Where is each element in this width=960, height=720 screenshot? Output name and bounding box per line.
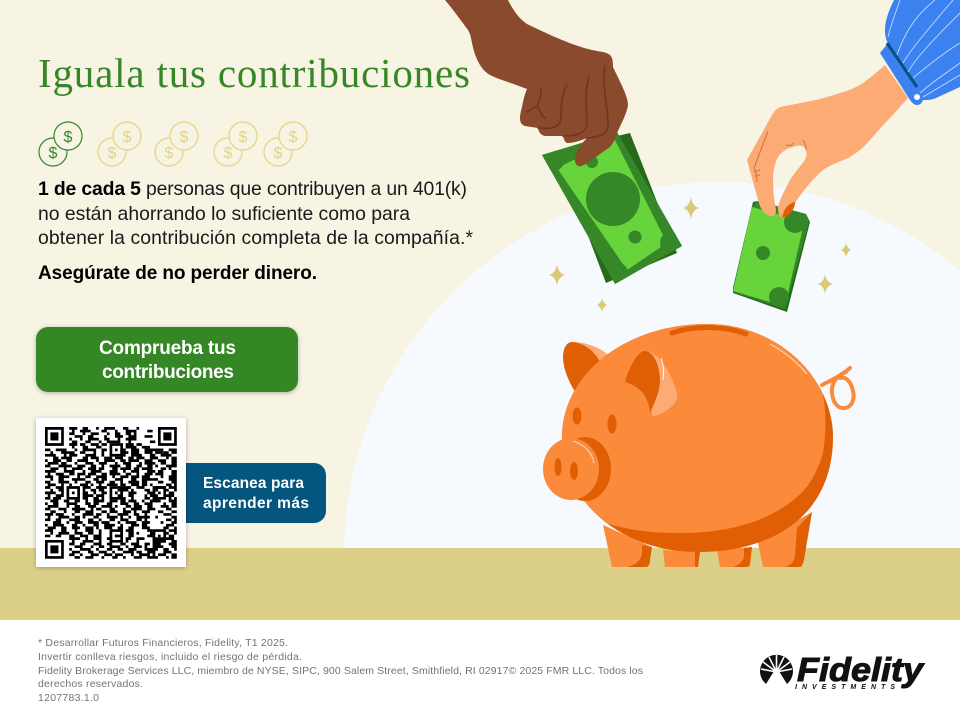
call to action button: Comprueba tus [99,338,236,359]
coin pair 4 [214,122,257,166]
coin pair 1 highlighted green: $ [64,129,73,146]
coin pair 2: $ [123,129,132,146]
pale blue arc backdrop [344,182,960,548]
body text: 1 de cada 5 personas que contribuyen a un 401(k) [38,178,467,200]
far ear [563,342,608,392]
footnotes: Fidelity Brokerage Services LLC, miembro de NYSE, SIPC, 900 Salem Street, Smithfield, RI 02917© 2025 FMR LLC. Todos los [38,665,643,677]
coin pair 2: $ [108,145,117,162]
dollar bill held by dark hand [541,132,684,284]
scan label tab: Escanea para [203,475,304,492]
Fidelity logo: INVESTMENTS [795,684,895,691]
coin pair 4: $ [224,145,233,162]
footnotes: Invertir conlleva riesgos, incluido el riesgo de pérdida. [38,651,302,663]
title: Iguala tus contribuciones [38,50,470,96]
pig legs [603,512,812,567]
scan label tab: aprender más [203,495,309,512]
QR code [36,418,186,567]
coin pair 3: $ [180,129,189,146]
call to action button: contribuciones [102,362,234,383]
coin pair 5: $ [274,145,283,162]
icon row: one of five coin pairs highlighted [39,122,307,166]
scan label tab [180,463,326,523]
coin pair 3 [155,122,198,166]
snout [543,437,611,501]
eyes [572,408,616,434]
footnotes [38,637,643,704]
emphasis line: Asegúrate de no perder dinero. [38,263,317,284]
coin pair 2 [98,122,141,166]
footnotes: * Desarrollar Futuros Financieros, Fidelity, T1 2025. [38,637,288,649]
body text: obtener la contribución completa de la compañía.* [38,227,473,249]
call to action button [36,327,298,392]
pig tail [822,368,854,408]
coin slot [672,327,746,334]
Fidelity logo: Fidelity [797,651,925,688]
piggy bank [543,320,860,567]
dark hand [445,0,628,166]
Fidelity logo [760,651,925,691]
body text [38,178,473,249]
light hand [747,65,908,217]
pig body [562,324,833,552]
near ear [625,351,677,416]
body text: no están ahorrando lo suficiente como para [38,203,410,225]
footer background [0,620,960,720]
coin pair 4: $ [239,129,248,146]
footnotes: derechos reservados. [38,678,143,690]
sparkles [549,196,851,312]
footnotes: 1207783.1.0 [38,692,99,704]
coin pair 5: $ [289,129,298,146]
sunburst mark [760,655,793,684]
coin pair 1 highlighted green: $ [49,145,58,162]
coin pair 3: $ [165,145,174,162]
ground band [0,548,960,620]
small dollar bill held by light hand [733,201,810,312]
coin pair 5 [264,122,307,166]
blue sleeve [880,0,960,105]
coin pair 1 highlighted green [39,122,82,166]
